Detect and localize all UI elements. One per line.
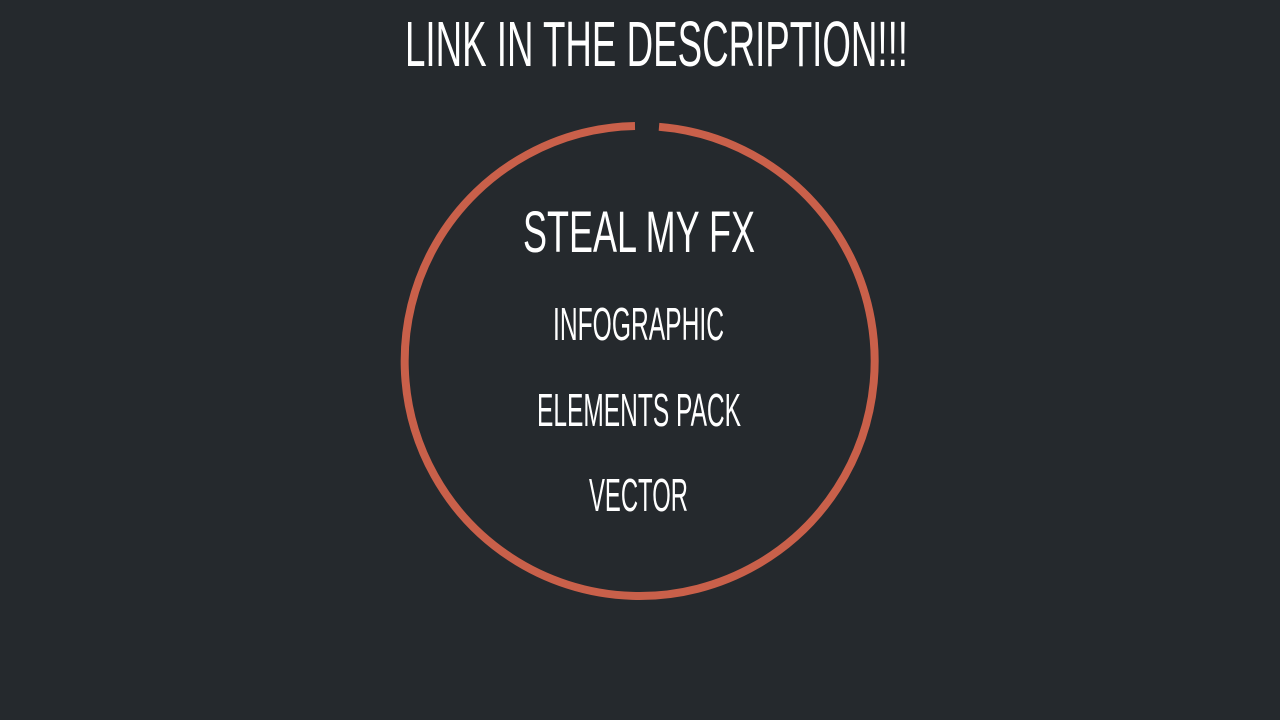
- text: elements pack: ELEMENTS PACK: [537, 384, 741, 436]
- ring: circular frame with top gap: [405, 126, 875, 596]
- text: vector: VECTOR: [589, 469, 688, 521]
- text: infographic: INFOGRAPHIC: [553, 298, 724, 350]
- title: LINK IN THE DESCRIPTION!!!: [405, 8, 908, 80]
- heading: steal my fx: STEAL MY FX: [523, 200, 755, 265]
